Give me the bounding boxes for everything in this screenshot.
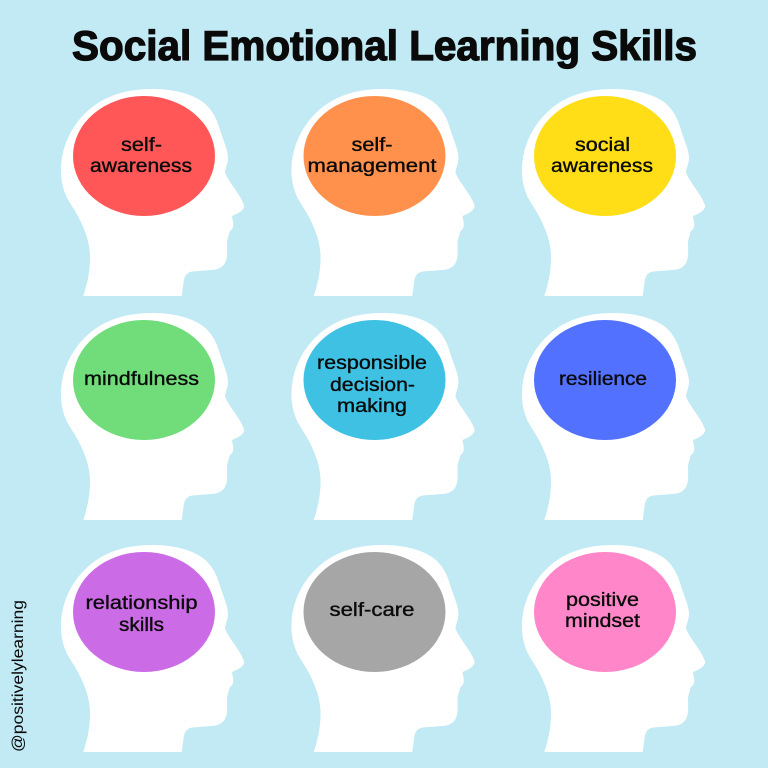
head: self-awareness [61, 89, 244, 296]
head: social awareness [522, 89, 705, 296]
head: self-management: self- [352, 135, 392, 156]
head: positive mindset: mindset [565, 611, 641, 632]
head: positive mindset [522, 545, 705, 752]
head: relationship skills: skills [119, 615, 164, 636]
head: responsible decision-making [291, 313, 475, 520]
head: resilience: resilience [559, 369, 647, 390]
head: self-management [291, 89, 475, 296]
head: mindfulness: mindfulness [84, 369, 199, 390]
head: relationship skills [61, 545, 244, 752]
handle credit: @positivelylearning [10, 600, 27, 752]
head: social awareness: social [575, 135, 630, 156]
head: responsible decision-making: decision- [330, 375, 415, 396]
head: responsible decision-making: making [337, 396, 407, 417]
title: Social Emotional Learning Skills [72, 22, 697, 69]
head: social awareness: awareness [551, 156, 653, 177]
head: self-management: management [308, 156, 437, 177]
head: self-care [291, 545, 475, 752]
head: self-care: self-care [330, 600, 414, 621]
head: relationship skills: relationship [86, 593, 198, 614]
head: self-awareness: awareness [90, 156, 192, 177]
head: resilience [522, 313, 705, 520]
head: responsible decision-making: responsible [317, 353, 427, 374]
head: self-awareness: self- [121, 135, 162, 156]
head: positive mindset: positive [566, 590, 639, 611]
head: mindfulness [61, 313, 244, 520]
